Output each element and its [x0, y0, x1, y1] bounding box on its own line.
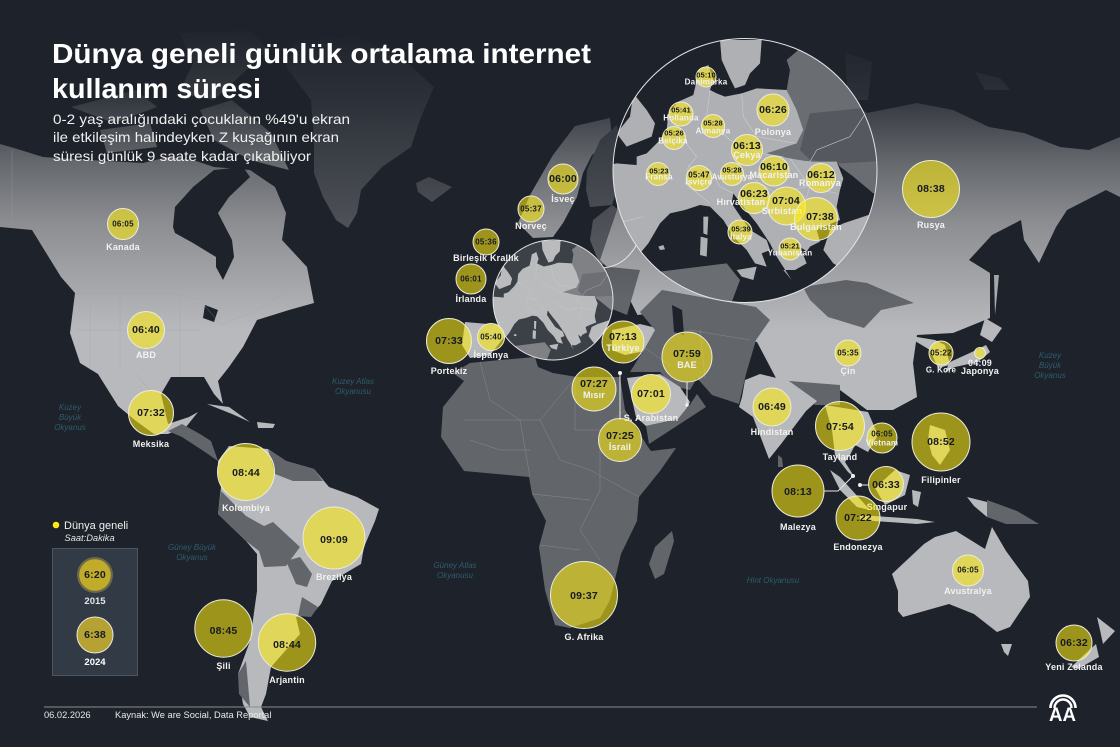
bubble: Sırbistan: Sırbistan: [762, 206, 802, 216]
US and Canada borders: [12, 150, 286, 391]
bubble: Hindistan: Hindistan: [751, 427, 793, 437]
large zoom circle: Europe: [612, 38, 878, 303]
bubble: G. Afrika: 09:37: [570, 590, 598, 602]
bubble: Polonya: Polonya: [755, 127, 792, 137]
logo: AA: [1049, 696, 1076, 726]
Scandinavia: [518, 118, 612, 238]
bubble: ABD: [128, 312, 164, 360]
bubble: Vietnam: [866, 423, 898, 453]
subtitle: süresi günlük 9 saate kadar çıkabiliyor: [53, 148, 311, 164]
bubble: G. Kore: 05:22: [930, 348, 952, 358]
bubble: Şili: [195, 600, 252, 671]
bubble: Türkiye: [602, 321, 644, 363]
Tasmania: [1001, 644, 1012, 656]
bubble: İsrail: 07:25: [606, 430, 634, 442]
ocean label: Hint: Hint Okyanusu: [747, 576, 800, 585]
bubble: İsviçre: 05:47: [688, 170, 710, 180]
bubble: Kolombiya: Kolombiya: [222, 503, 271, 513]
bubble: İsviçre: [686, 166, 713, 190]
bubble: Çekya: Çekya: [733, 150, 762, 160]
Turkey: [612, 324, 665, 355]
bubble: Filipinler: 08:52: [927, 436, 955, 448]
bubble: Fransa: [645, 162, 673, 186]
bubble: Çin: 05:35: [837, 348, 859, 358]
bubble: Vietnam: Vietnam: [866, 438, 898, 448]
bubble: Kolombiya: [218, 444, 274, 513]
bubble: Hollanda: [663, 102, 699, 126]
bubble: Brezilya: [303, 507, 365, 582]
bubble: Hırvatistan: 06:23: [740, 188, 768, 200]
bubble: İspanya: [474, 324, 509, 360]
Middle East and Central Asia: [630, 290, 770, 404]
bubble: S. Arabistan: [624, 374, 678, 423]
bubble: Romanya: [799, 164, 842, 192]
bubble: Yeni Zelanda: 06:32: [1060, 637, 1088, 649]
bubble: Türkiye: 07:13: [609, 331, 637, 343]
ocean label: Güney Büyük: Güney Büyük: [168, 543, 216, 552]
bubble: Arjantin: Arjantin: [269, 675, 305, 685]
landmass: Arctic islands: [71, 30, 289, 170]
bubble: Filipinler: Filipinler: [921, 475, 961, 485]
bubble: İsveç: İsveç: [551, 194, 575, 204]
bubble: Birleşik Krallık: [453, 229, 520, 263]
bubble: Avustralya: [944, 555, 993, 596]
title: Dünya geneli günlük ortalama internet: [52, 38, 591, 69]
bubble: Şili: Şili: [216, 661, 231, 671]
bubble: Arjantin: [258, 614, 316, 685]
bubble: Yunanistan: Yunanistan: [768, 248, 812, 258]
bubble: G. Kore: G. Kore: [926, 366, 956, 374]
ocean label: Güney Büyük: Okyanus: [176, 553, 208, 562]
date: 06.02.2026: [44, 710, 91, 720]
bubble: İspanya: 05:40: [480, 332, 502, 342]
bubble: Rusya: Rusya: [917, 220, 946, 230]
bubble: Avustralya: Avustralya: [944, 586, 993, 596]
Eurasia: [600, 95, 1120, 410]
bubble: Birleşik Krallık: Birleşik Krallık: [453, 253, 520, 263]
Sri Lanka: [778, 455, 783, 467]
bubble: Malezya: 08:13: [784, 486, 812, 498]
bubble: Vietnam: 06:05: [871, 430, 893, 438]
Black Sea: [612, 314, 652, 328]
bubble: Singapur: Singapur: [867, 502, 908, 512]
bubble: Avusturya: 05:28: [722, 166, 742, 174]
bubble: Brezilya: 09:09: [320, 534, 348, 546]
bubble: Meksika: [128, 390, 174, 449]
bubble: Sırbistan: 07:04: [772, 195, 800, 207]
central Asian borders: [645, 330, 750, 378]
bubble: Danimarka: [685, 67, 728, 87]
legend bubble 2015: 6:20: [84, 569, 106, 581]
title: kullanım süresi: [52, 73, 261, 104]
bubble: Singapur: [867, 466, 908, 512]
legend bubble 2024: [77, 617, 113, 668]
Madagascar: [649, 531, 674, 579]
Ukraine: [590, 265, 640, 315]
bubble: Sırbistan: [762, 187, 806, 225]
Africa: [441, 357, 676, 628]
bubble: Endonezya: [833, 496, 883, 552]
Finland and Baltics: [586, 125, 640, 265]
bubble: Norveç: 05:37: [520, 204, 542, 214]
bubble: Tayland: 07:54: [826, 421, 854, 433]
bubble: Rusya: [902, 160, 960, 230]
bubble: Japonya: Japonya: [961, 366, 1000, 376]
bubble: Kanada: 06:05: [112, 220, 134, 228]
bubble: Norveç: [515, 196, 547, 231]
Arabian Peninsula: [627, 374, 690, 426]
bubble: Almanya: 05:28: [703, 118, 723, 128]
bubble: G. Kore: [926, 341, 956, 374]
subtitle: [53, 111, 350, 164]
Hudson Bay: [173, 167, 250, 280]
bubble: Çin: [835, 340, 861, 376]
bubble: Polonya: [755, 94, 792, 137]
bubble: Filipinler: [912, 413, 970, 485]
Caspian Sea: [672, 305, 684, 335]
Central America: [168, 424, 218, 461]
source: Kaynak: We are Social, Data Reportal: [115, 710, 271, 720]
bubble: G. Afrika: G. Afrika: [565, 632, 604, 642]
ocean label: Güney Atlas: Güney Atlas: [433, 561, 477, 570]
Mongolia: [803, 280, 914, 328]
bubble: Yunanistan: 05:21: [780, 242, 800, 250]
bubble: Avusturya: Avusturya: [712, 172, 753, 182]
South American mid-tone countries: [218, 449, 323, 707]
bubble: ABD: 06:40: [132, 324, 160, 336]
bubble: Fransa: Fransa: [645, 172, 673, 182]
bubble: Mısır: [572, 367, 616, 411]
bubble: Malezya: [772, 465, 824, 532]
legend: [52, 520, 138, 676]
bubble: Belçika: 05:26: [664, 128, 684, 138]
ocean label: Kuzey Büyük west: Kuzey: [59, 403, 81, 412]
Great Lakes: [203, 305, 218, 322]
legend dot: [53, 522, 59, 528]
legend bubble 2024: 6:38: [84, 629, 106, 641]
bubble: Japonya: 04:09: [968, 358, 992, 368]
bubble: Hindistan: [751, 388, 793, 437]
bubble: Norveç: Norveç: [515, 221, 547, 231]
bubble: Mısır: Mısır: [583, 390, 605, 400]
legend bubble 2015: 2015: [84, 596, 106, 607]
bubble: Mısır: 07:27: [580, 378, 608, 390]
ocean label: Kuzey Atlas: Okyanusu: [335, 387, 372, 396]
bubble: BAE: 07:59: [673, 348, 701, 360]
bubble: Rusya: 08:38: [917, 183, 945, 195]
landmass: North America: [0, 144, 314, 434]
ocean label: Kuzey Büyük east: Kuzey: [1039, 351, 1061, 360]
bubble: Kanada: Kanada: [106, 242, 141, 252]
bubble: Almanya: [696, 114, 731, 138]
bubble: Hindistan: 06:49: [758, 401, 786, 413]
bubble: Şili: 08:45: [210, 625, 237, 637]
bubble: Almanya: Almanya: [696, 126, 731, 136]
bubble: Hollanda: 05:41: [671, 106, 691, 114]
subtitle: 0-2 yaş aralığındaki çocukların %49'u ekran: [53, 111, 350, 127]
title: [52, 38, 591, 104]
bubble: İrlanda: 06:01: [460, 274, 482, 284]
leader lines: [618, 371, 869, 491]
bubble: Portekiz: Portekiz: [431, 366, 468, 376]
bubble: Birleşik Krallık: 05:36: [475, 238, 497, 246]
bubble: Romanya: 06:12: [807, 169, 835, 181]
Southeast Asia: [825, 405, 878, 478]
bubble: S. Arabistan: 07:01: [637, 388, 665, 400]
bubble: İrlanda: [456, 264, 487, 304]
ocean label: Kuzey Büyük east: Okyanus: [1034, 371, 1066, 380]
connector arc between lens circles: [603, 244, 637, 268]
bubble: Çekya: 06:13: [733, 140, 761, 152]
bubble: Yeni Zelanda: Yeni Zelanda: [1045, 662, 1104, 672]
bubble: Tayland: Tayland: [823, 452, 857, 462]
landmass: Iceland: [416, 177, 452, 202]
legend bubble 2024: 2024: [84, 657, 106, 668]
bubble: Portekiz: 07:33: [435, 335, 463, 347]
bubble: Malezya: Malezya: [780, 522, 817, 532]
bubble: Singapur: 06:33: [872, 479, 900, 491]
bubble: Kanada: [106, 208, 141, 252]
bubble: Yeni Zelanda: [1045, 625, 1104, 672]
ocean label: Güney Atlas: Okyanusu: [437, 571, 474, 580]
Korea and Japan: [890, 275, 1002, 404]
Indonesia and Philippines islands: [830, 425, 987, 524]
bubble: İtalya: İtalya: [730, 232, 752, 242]
bubble: Belçika: [658, 126, 688, 150]
bubble: İtalya: 05:39: [731, 224, 751, 234]
legend title: Dünya geneli: [64, 520, 128, 532]
bubble: Meksika: 07:32: [137, 407, 165, 419]
bubble: İsveç: 06:00: [549, 173, 577, 185]
Papua New Guinea: [987, 500, 1039, 524]
bubble: Yunanistan: [768, 238, 812, 260]
bubble: İspanya: İspanya: [474, 350, 509, 360]
small locator circle: Europe: [492, 240, 614, 360]
bubble: Danimarka: Danimarka: [685, 78, 728, 86]
New Zealand: [1071, 617, 1115, 669]
Himalayan states: [777, 380, 840, 405]
footer rule: [44, 706, 1037, 708]
ocean label: Kuzey Atlas: Kuzey Atlas: [332, 377, 374, 386]
bubble: İrlanda: İrlanda: [456, 294, 487, 304]
landmass: Greenland: [286, 37, 434, 228]
bubble: Bulgaristan: [790, 198, 842, 240]
bubble: Arjantin: 08:44: [273, 639, 301, 651]
legend unit: Saat:Dakika: [64, 533, 115, 543]
South America: [218, 446, 379, 721]
Arctic Russia islands: [845, 52, 1010, 100]
ocean labels: [54, 351, 1066, 585]
bubble: Macaristan: Macaristan: [749, 170, 799, 180]
bubble: Macaristan: [749, 156, 799, 186]
legend bubble 2015: [77, 557, 113, 607]
bubble: BAE: BAE: [677, 360, 697, 370]
bubble: ABD: ABD: [136, 350, 156, 360]
bubble: Tayland: [816, 402, 864, 462]
bubble: Danimarka: 05:10: [696, 70, 716, 80]
bubble: Kolombiya: 08:44: [232, 467, 260, 479]
bubble: S. Arabistan: S. Arabistan: [624, 413, 678, 423]
logo: AA: AA: [1049, 705, 1076, 726]
Yemen and Oman: [646, 394, 706, 444]
bubble: Macaristan: 06:10: [760, 161, 788, 173]
bubble: G. Afrika: [550, 562, 618, 642]
ocean label: Kuzey Büyük west: Okyanus: [54, 423, 86, 432]
ocean label: Kuzey Büyük east: Büyük: [1039, 361, 1062, 370]
bubble: Japonya: [961, 348, 1000, 376]
bubble: Fransa: 05:23: [649, 166, 669, 176]
bubble: Çekya: [732, 134, 762, 166]
bubble: Hollanda: Hollanda: [663, 114, 699, 122]
ocean label: Kuzey Büyük west: Büyük: [59, 413, 82, 422]
bubble: Endonezya: Endonezya: [833, 542, 883, 552]
bubble: Endonezya: 07:22: [844, 512, 872, 524]
bubble: Polonya: 06:26: [759, 104, 787, 116]
Caribbean islands: [207, 404, 275, 428]
bubble: Hırvatistan: [717, 182, 770, 214]
bubble: İsrail: [598, 418, 642, 462]
bubble: BAE: [662, 332, 712, 382]
bubble: Bulgaristan: 07:38: [806, 211, 834, 223]
bubble: Romanya: Romanya: [799, 178, 842, 188]
bubble: Meksika: Meksika: [133, 439, 170, 449]
bubble: Avustralya: 06:05: [957, 566, 979, 574]
African borders: [464, 362, 639, 560]
bubble: Brezilya: Brezilya: [316, 572, 353, 582]
bubble: Avusturya: [712, 162, 753, 186]
bubble: Belçika: Belçika: [658, 136, 688, 146]
bubble: Hırvatistan: Hırvatistan: [717, 197, 765, 207]
Australia: [892, 527, 1030, 632]
bubble: Türkiye: Türkiye: [606, 343, 640, 353]
bubble: İsrail: İsrail: [609, 442, 631, 452]
bubble: Bulgaristan: Bulgaristan: [790, 222, 842, 232]
India: [739, 374, 817, 459]
Spain: [462, 322, 506, 358]
bubble: İsviçre: İsviçre: [686, 178, 713, 186]
bubble: Portekiz: [426, 318, 472, 376]
subtitle: ile etkileşim halindeyken Z kuşağının ekran: [53, 129, 339, 145]
bubble: İsveç: [548, 164, 578, 204]
bubble: Çin: Çin: [840, 366, 856, 376]
bubble: İtalya: [728, 220, 752, 244]
legend panel: [52, 548, 138, 676]
